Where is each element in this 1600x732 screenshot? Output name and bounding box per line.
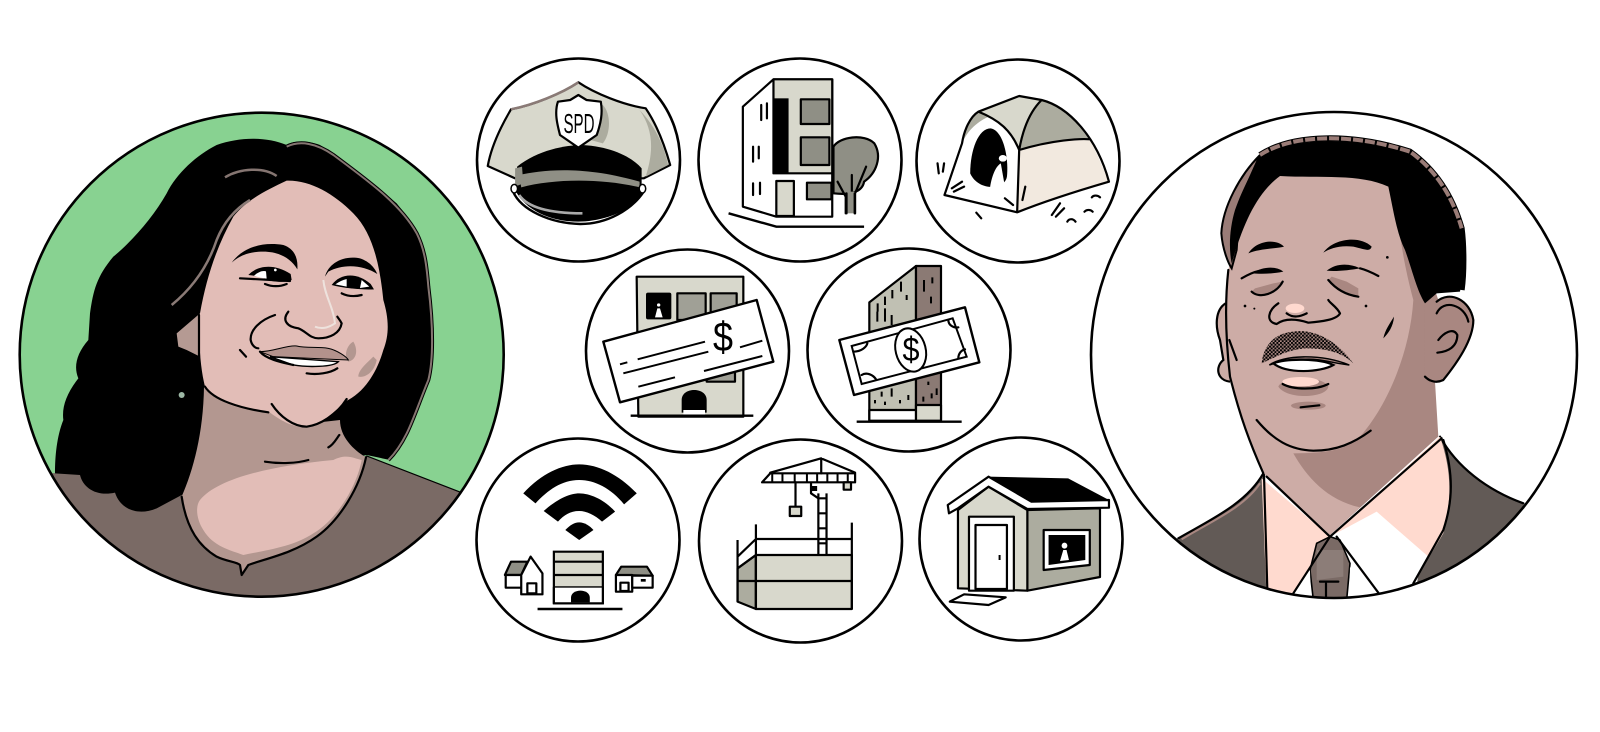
icon: check over building [586,250,789,452]
hair [1221,138,1463,303]
portrait: woman on green background [20,113,504,633]
portrait: man in suit [1091,112,1577,607]
ear right [1425,297,1473,382]
icon: check over building: $ [713,313,733,360]
mustache [1262,331,1353,363]
face features [1248,242,1284,253]
shirt collar [1262,437,1449,600]
icon: apartment building with tree [698,58,902,262]
icon: camping tent [916,60,1120,262]
right eye [332,275,374,296]
icon: police hat with SPD badge: SPD [564,108,594,139]
icon: police hat with SPD badge [477,58,680,262]
icon: wifi over houses [476,438,680,642]
tie [1309,536,1351,597]
icon: small backyard house [920,438,1122,640]
left eye [240,267,292,286]
icon: dollar bill over tower: $ [902,331,920,369]
icon: dollar bill over tower [808,248,1010,452]
icon: construction crane and fenced site [699,440,902,642]
ear left [1217,303,1230,382]
suit [1177,436,1524,587]
